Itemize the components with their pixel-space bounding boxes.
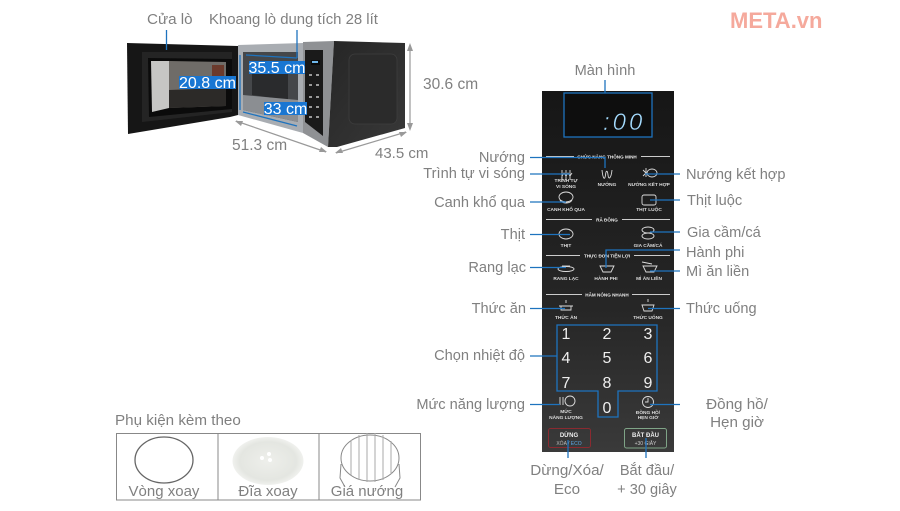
display: :00 [603,109,645,136]
section: Chức năng thông minh: CHỨC NĂNG THÔNG MINH [577,152,637,160]
button: Đồng hồ / Hẹn giờ [636,396,661,421]
dimension: 35.5 cm: 35.5 cm [249,60,305,77]
button: Thịt luộc [636,195,662,213]
dimension: 20.8 cm [179,55,240,110]
dimension: 33 cm [243,101,307,126]
section: Thực đơn tiện lợi: THỰC ĐƠN TIỆN LỢI [584,252,630,258]
label: Dừng / Xóa / Eco [530,440,605,498]
microwave side [328,41,405,147]
label: Canh khổ qua [434,195,566,211]
button: Dừng: XÓA / ECO [556,440,582,447]
label: Thịt [501,227,570,243]
dimension: 43.5 cm: 43.5 cm [375,145,428,162]
button: Thức uống [633,299,663,321]
accessory: Đĩa xoay: Đĩa xoay [238,483,298,500]
label: Màn hình [575,63,635,93]
keypad: 3 [644,326,653,343]
section: Thực đơn tiện lợi [546,252,670,258]
button: Dừng: DỪNG [560,432,578,439]
button: Hành phi [594,266,618,282]
label: Chọn nhiệt độ: Chọn nhiệt độ [434,348,525,364]
label: Rang lạc [468,260,566,276]
button: Bắt đầu [624,428,666,448]
label: Thức uống [648,301,757,317]
keypad: 4 [562,350,571,367]
accessory: Giá nướng [331,433,403,500]
keypad: 0 [603,400,612,417]
button: Trình tự vi sóng: TRÌNH TỰ [555,176,577,184]
label: Dừng / Xóa / Eco: Eco [554,481,580,498]
label: Gia cầm/cá: Gia cầm/cá [687,225,762,241]
dimension: 20.8 cm: 20.8 cm [179,75,236,92]
button: Nướng: NƯỚNG [598,180,617,188]
button: Mức năng lượng: NĂNG LƯỢNG [549,414,583,421]
keypad: 8 [603,375,612,392]
dimension: 51.3 cm [232,121,327,154]
button: Mì ăn liền [636,262,662,282]
button: Bắt đầu: BẮT ĐẦU [632,431,659,439]
dimension: 33 cm: 33 cm [264,101,307,118]
section: Rã đông [546,216,670,222]
keypad: 1 [562,326,571,343]
accessory: Vòng xoay [129,437,200,500]
label: Nướng kết hợp: Nướng kết hợp [686,167,786,183]
label: Thịt luộc: Thịt luộc [687,193,742,209]
button: Thịt luộc: THỊT LUỘC [636,205,662,213]
label: Thịt: Thịt [501,227,525,243]
button: Nướng [598,170,617,188]
display [564,93,652,137]
label: Dừng / Xóa / Eco: Dừng/Xóa/ [530,462,605,479]
button: Mức năng lượng [549,396,583,421]
section: Chức năng thông minh [546,152,670,160]
button: Nướng kết hợp [628,168,671,188]
label: Bắt đầu / + 30 giây: Bắt đầu/ [620,462,675,479]
button: Rang lạc [553,266,579,282]
button: Gia cầm/cá [634,227,663,249]
button: Thức ăn [555,300,578,321]
button: Dừng [548,428,590,448]
label: Trình tự vi sóng: Trình tự vi sóng [423,166,525,182]
label: Mì ăn liền [650,264,749,280]
label: Bắt đầu / + 30 giây: + 30 giây [617,482,678,498]
keypad: 7 [562,375,571,392]
button: Canh khổ qua [547,192,585,213]
button: Thức ăn: THỨC ĂN [555,314,578,321]
accessory: Vòng xoay: Vòng xoay [129,483,200,500]
button: Trình tự vi sóng: VI SÓNG [556,182,576,190]
dimension: 30.6 cm: 30.6 cm [423,76,478,93]
keypad: 5 [603,350,612,367]
label: Nướng [479,150,605,168]
button: Thịt [559,229,573,249]
button: Bắt đầu: +30 GIÂY [635,440,657,447]
accessory: Giá nướng: Giá nướng [331,483,403,500]
oven cavity [238,43,303,133]
label: Đồng hồ / Hẹn giờ: Đồng hồ/ [706,396,769,413]
button: Canh khổ qua: CANH KHỔ QUA [547,206,585,213]
microwave door [127,43,238,134]
control panel [542,91,674,452]
button: Trình tự vi sóng [555,170,577,190]
button: Thức uống: THỨC UỐNG [633,314,663,321]
keypad: 9 [644,375,653,392]
label: Nướng: Nướng [479,150,525,166]
button: Mức năng lượng: MỨC [560,408,572,415]
callout lines: door and cavity [166,30,297,58]
control strip [303,41,334,147]
label: Bắt đầu / + 30 giây [617,438,678,498]
accessory: Đĩa xoay [232,437,304,500]
label: Cửa lò: Cửa lò [147,11,193,28]
dimension: 43.5 cm [335,132,428,162]
button: Hành phi: HÀNH PHI [594,275,618,282]
keypad: 2 [603,326,612,343]
logo: META.vn: META.vn [730,8,822,33]
button: Gia cầm/cá: GIA CẦM/CÁ [634,242,663,249]
label: Canh khổ qua: Canh khổ qua [434,195,526,211]
button: Nướng kết hợp: NƯỚNG KẾT HỢP [628,180,671,188]
section: Hâm nóng nhanh [546,290,670,298]
label: Rang lạc: Rang lạc [468,260,526,276]
dimension: 30.6 cm [407,43,478,131]
button: Rang lạc: RANG LẠC [553,276,579,282]
label: Đồng hồ / Hẹn giờ: Hẹn giờ [710,414,764,431]
section: Hâm nóng nhanh: HÂM NÓNG NHANH [585,290,629,298]
panel: accessories [116,433,420,500]
label: Mì ăn liền: Mì ăn liền [686,264,749,280]
keypad: 6 [644,350,653,367]
button: Mì ăn liền: MÌ ĂN LIỀN [636,274,662,282]
label: Thịt luộc [650,193,742,209]
dimension: 51.3 cm: 51.3 cm [232,137,287,154]
label: Khoang lò dung tích 28 lít: Khoang lò dung tích 28 lít [209,12,379,28]
button: Thịt: THỊT [561,243,571,249]
section: Rã đông: RÃ ĐÔNG [596,216,618,222]
label: Hành phi: Hành phi [686,245,744,261]
label: Thức uống: Thức uống [686,301,757,317]
label: Màn hình: Màn hình [575,63,635,79]
label: Thức ăn [472,301,565,317]
accessories heading: Phụ kiện kèm theo [115,412,241,429]
button: Đồng hồ / Hẹn giờ: HẸN GIỜ [638,413,659,421]
microwave illustration [127,41,405,147]
label: Hành phi [606,245,744,268]
label: Đồng hồ / Hẹn giờ [650,396,769,431]
label: Mức năng lượng: Mức năng lượng [416,397,525,413]
keypad [557,325,657,417]
button: Đồng hồ / Hẹn giờ: ĐỒNG HỒ/ [636,409,661,416]
label: Gia cầm/cá [650,225,762,241]
label: Thức ăn: Thức ăn [472,301,526,317]
